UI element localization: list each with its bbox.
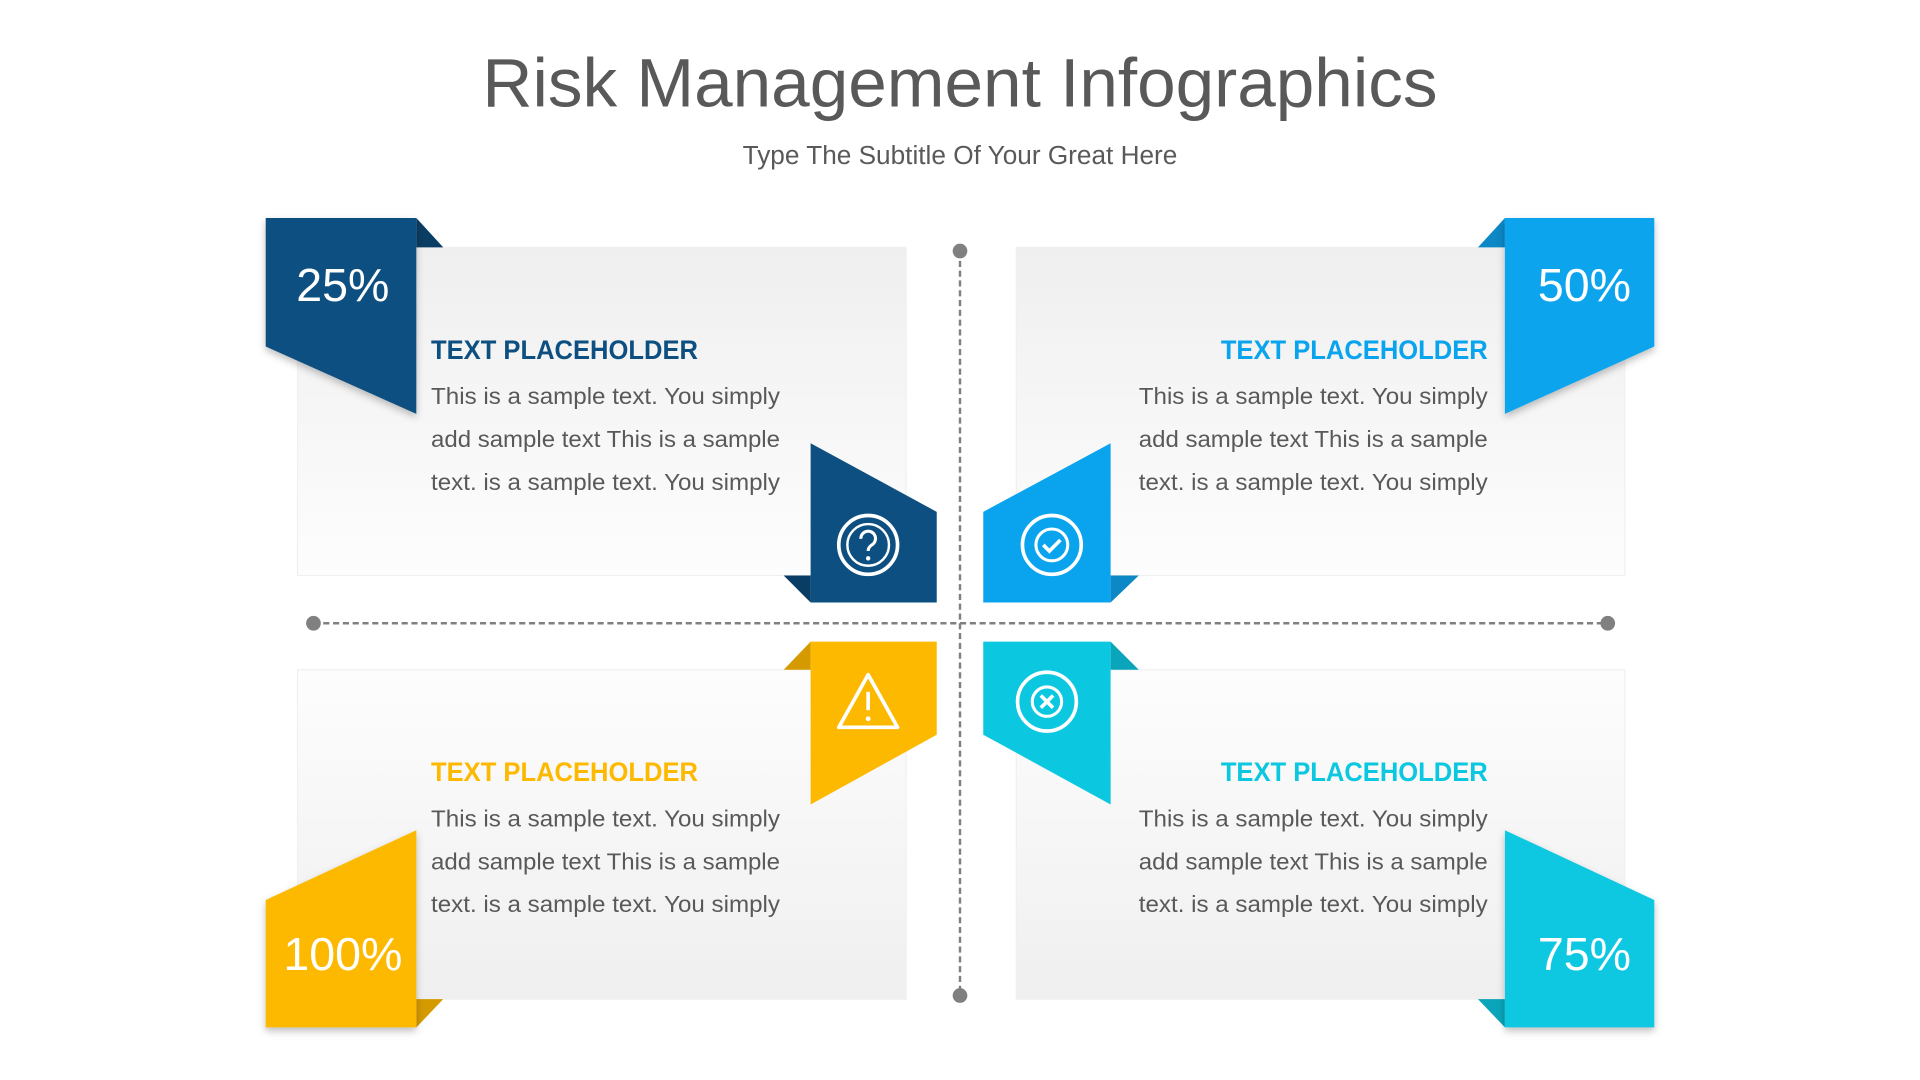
body text: text. is a sample text. You simply [431,469,780,495]
panel: top-right [983,218,1654,602]
ribbon: 75%: 75% [1538,928,1631,980]
panel: bottom-left [266,642,937,1027]
body text [431,383,780,495]
body text: text. is a sample text. You simply [431,891,780,917]
panel: top-left [266,218,937,602]
ribbon: 50% [1478,218,1654,414]
body text: add sample text This is a sample [1139,426,1488,452]
body text [431,806,780,917]
dashed vertical line [953,244,967,1003]
title: Risk Management Infographics [482,45,1438,122]
body text: add sample text This is a sample [431,848,780,874]
icon tab: question [784,443,937,602]
ribbon: 75% [1478,830,1654,1027]
ribbon: 50%: 50% [1538,259,1631,311]
body text [1139,383,1488,495]
panel: bottom-right [983,642,1654,1027]
body text: This is a sample text. You simply [1139,383,1488,409]
body text: This is a sample text. You simply [431,806,780,832]
heading: TEXT PLACEHOLDER [431,335,698,365]
heading: TEXT PLACEHOLDER [1221,757,1488,787]
heading: TEXT PLACEHOLDER [1221,335,1488,365]
body text: text. is a sample text. You simply [1139,891,1488,917]
body text: This is a sample text. You simply [1139,806,1488,832]
icon tab: cross [983,642,1139,804]
body text: add sample text This is a sample [431,426,780,452]
body text [1139,806,1488,917]
body text: text. is a sample text. You simply [1139,469,1488,495]
heading: TEXT PLACEHOLDER [431,757,698,787]
ribbon: 25%: 25% [296,259,389,311]
ribbon: 100%: 100% [283,928,402,980]
body text: This is a sample text. You simply [431,383,780,409]
dashed horizontal line [306,616,1615,631]
icon tab: check [983,443,1139,602]
body text: add sample text This is a sample [1139,848,1488,874]
icon tab: warning [784,642,937,804]
ribbon: 25% [266,218,443,414]
subtitle: Type The Subtitle Of Your Great Here [743,142,1177,170]
ribbon: 100% [266,830,443,1027]
